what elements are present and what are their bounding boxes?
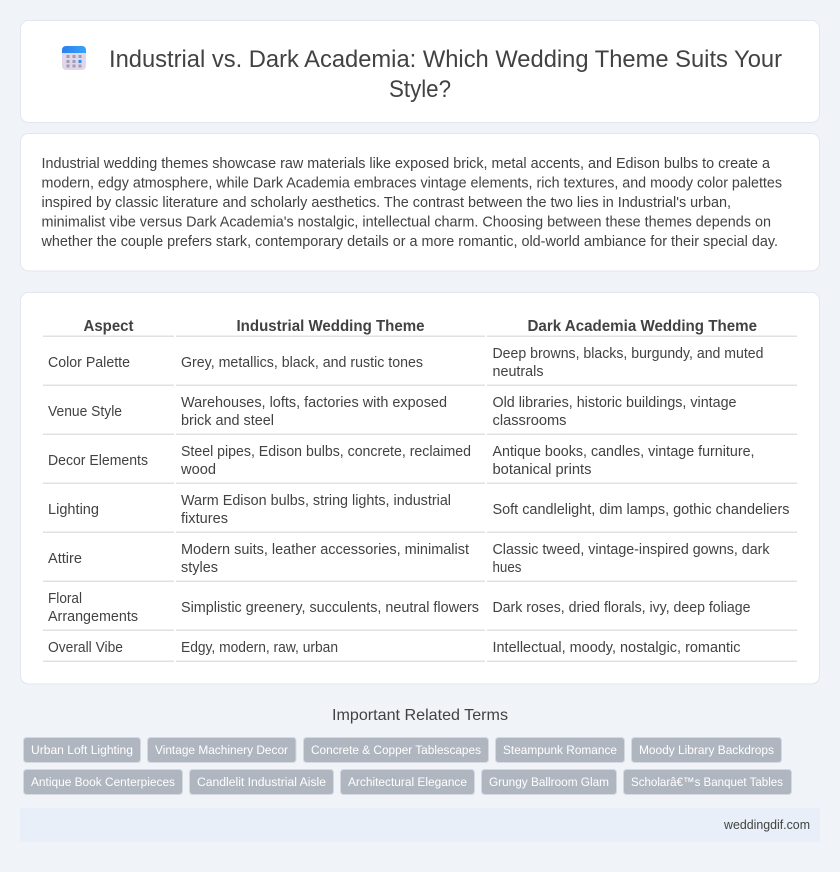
text block: introduction paragraph: minimalist vibe versus Dark Academia's nostalgic, intellectual charm. Choosing between these themes depends on [42, 214, 771, 230]
title: Industrial vs. Dark Academia: Which Wedding Theme Suits Your [109, 46, 782, 73]
tag: candlelit industrial aisle: Candlelit Industrial Aisle [197, 775, 326, 789]
table row: decor elements: Antique books, candles, vintage furniture, [492, 444, 754, 460]
table row: overall vibe [43, 640, 797, 662]
tag: antique book centerpieces: Antique Book Centerpieces [31, 775, 175, 789]
tag: concrete and copper tablescapes [304, 738, 488, 762]
text block: introduction paragraph [41, 156, 782, 250]
panel: comparison table [20, 292, 820, 684]
tag: scholar's banquet tables [624, 770, 792, 794]
title [109, 46, 782, 103]
table row: decor elements: Steel pipes, Edison bulbs, concrete, reclaimed [181, 444, 471, 460]
table row: lighting: Soft candlelight, dim lamps, gothic chandeliers [492, 502, 790, 518]
table row: venue style: classrooms [492, 413, 566, 429]
heading: important related terms: Important Related Terms [332, 707, 508, 724]
tag list: related terms [24, 738, 792, 794]
tag: urban loft lighting: Urban Loft Lighting [31, 743, 133, 757]
tag: steampunk romance: Steampunk Romance [503, 743, 617, 757]
table row: color palette: Color Palette [48, 355, 130, 371]
table row: color palette: neutrals [492, 364, 544, 380]
table row: attire: hues [492, 560, 522, 576]
footer text: site name: weddingdif.com [723, 817, 810, 832]
table row: decor elements: botanical prints [492, 462, 592, 478]
tag: candlelit industrial aisle [190, 770, 334, 794]
title: Style? [389, 76, 451, 103]
table row: attire [43, 542, 797, 582]
table row: decor elements: wood [180, 462, 216, 478]
icon: calendar [62, 46, 86, 70]
table row: lighting: Warm Edison bulbs, string lights, industrial [181, 493, 451, 509]
table row: lighting: fixtures [181, 511, 228, 527]
table row: venue style: Warehouses, lofts, factories with exposed [181, 395, 447, 411]
table row: attire: styles [181, 560, 218, 576]
table header row: Aspect [84, 318, 134, 335]
table row: venue style: brick and steel [181, 413, 274, 429]
table header row: Industrial Wedding Theme [236, 318, 425, 335]
table row: floral arrangements: Simplistic greenery, succulents, neutral flowers [181, 600, 479, 616]
tag: vintage machinery decor [148, 738, 296, 762]
table row: overall vibe: Overall Vibe [48, 640, 123, 656]
table header row: Dark Academia Wedding Theme [528, 318, 757, 335]
table row: floral arrangements: Dark roses, dried florals, ivy, deep foliage [492, 600, 751, 616]
panel: introduction [20, 134, 820, 271]
text block: introduction paragraph: Industrial wedding themes showcase raw materials like exposed brick, metal accents, and Edison bulbs to create a [42, 156, 771, 172]
table row: attire: Attire [48, 551, 82, 567]
tag: steampunk romance [496, 738, 624, 762]
tag: scholar's banquet tables: Scholarâ€™s Banquet Tables [631, 775, 783, 789]
tag: antique book centerpieces [24, 770, 182, 794]
table row: decor elements [43, 444, 797, 484]
table row: attire: Classic tweed, vintage-inspired gowns, dark [492, 542, 770, 558]
table row: color palette: Deep browns, blacks, burgundy, and muted [492, 346, 764, 362]
table row: color palette: Grey, metallics, black, and rustic tones [181, 355, 423, 371]
footer [20, 808, 820, 842]
text block: introduction paragraph: modern, edgy atmosphere, while Dark Academia embraces vintage elements, rich textures, and moody color palettes [42, 176, 782, 192]
table row: color palette [43, 346, 797, 386]
table row: overall vibe: Edgy, modern, raw, urban [181, 640, 338, 656]
tag: architectural elegance: Architectural Elegance [348, 775, 467, 789]
table row: attire: Modern suits, leather accessories, minimalist [181, 542, 469, 558]
table row: overall vibe: Intellectual, moody, nostalgic, romantic [492, 640, 740, 656]
tag: moody library backdrops: Moody Library Backdrops [639, 743, 774, 757]
table row: venue style: Venue Style [48, 404, 122, 420]
table row: lighting: Lighting [48, 502, 99, 518]
tag: grungy ballroom glam: Grungy Ballroom Glam [489, 775, 609, 789]
tag: grungy ballroom glam [482, 770, 616, 794]
text block: introduction paragraph: inspired by classic literature and scholarly aesthetics. The contrast between the two lies in Industrial's urban, [42, 195, 731, 211]
text block: introduction paragraph: whether the couple prefers stark, contemporary details or a more romantic, old-world ambiance for their special day. [41, 234, 778, 250]
tag: vintage machinery decor: Vintage Machinery Decor [155, 743, 288, 757]
panel: header [20, 20, 820, 122]
table row: floral arrangements: Arrangements [48, 609, 138, 625]
table row: decor elements: Decor Elements [48, 453, 148, 469]
table row: venue style [43, 395, 797, 435]
table header row [43, 318, 797, 337]
tag: concrete and copper tablescapes: Concrete & Copper Tablescapes [311, 743, 481, 757]
table row: lighting [43, 493, 797, 533]
table row: floral arrangements [43, 591, 797, 631]
tag: urban loft lighting [24, 738, 140, 762]
table row: floral arrangements: Floral [48, 591, 82, 607]
table row: venue style: Old libraries, historic buildings, vintage [492, 395, 737, 411]
tag: moody library backdrops [632, 738, 782, 762]
tag: architectural elegance [340, 770, 474, 794]
